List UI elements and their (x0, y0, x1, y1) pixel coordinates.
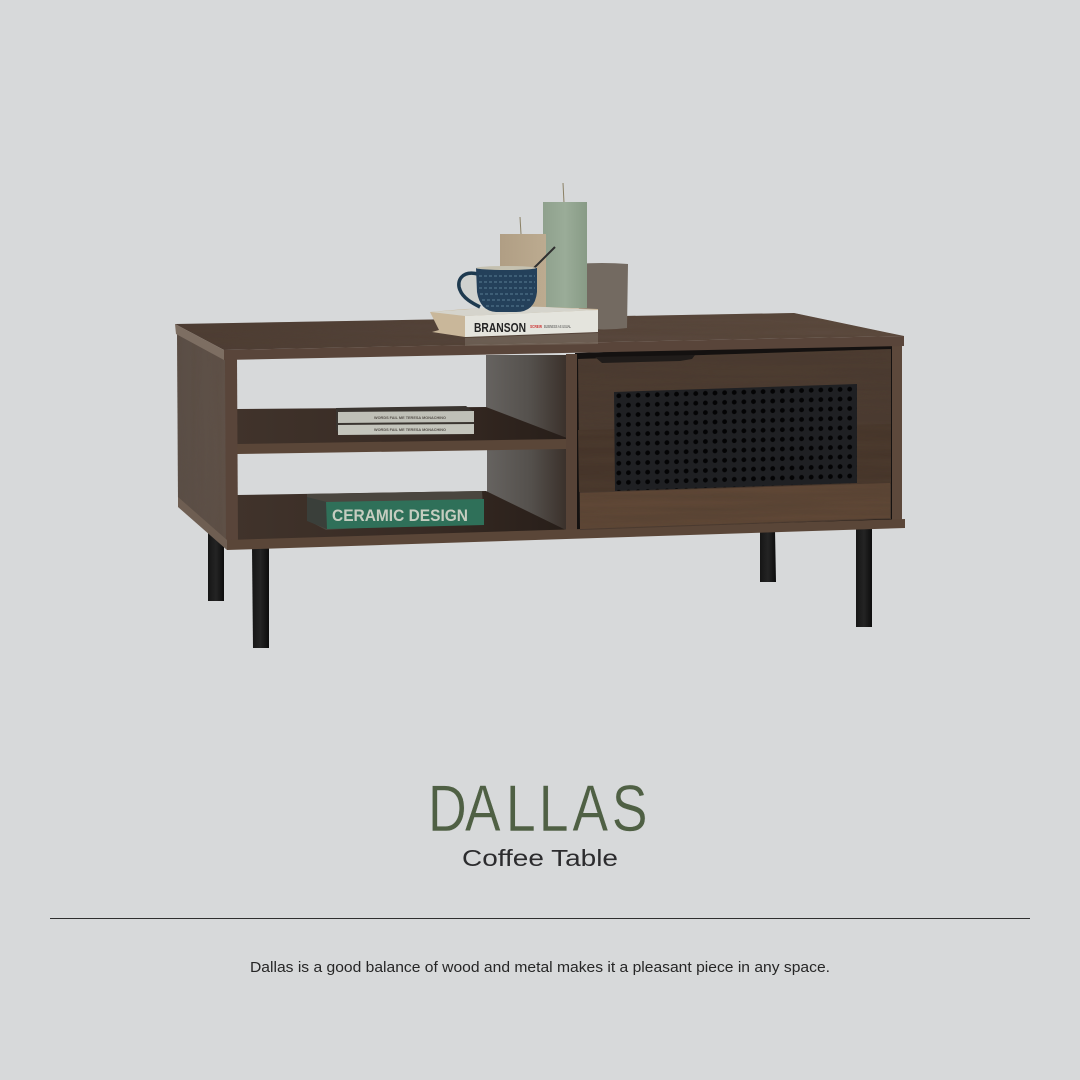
leg: front left (252, 548, 269, 648)
divider line (50, 918, 1030, 919)
beige candle (500, 217, 546, 308)
stacked books on shelf: WORDS FAIL ME TERESA MONACHINO (374, 427, 446, 432)
table top surface (175, 313, 904, 350)
table top front edge (224, 336, 904, 360)
mug (459, 247, 555, 312)
book: Ceramic Design: CERAMIC DESIGN (332, 506, 468, 525)
stacked books on shelf (336, 406, 474, 435)
bottom front edge (227, 519, 905, 550)
left side panel (177, 332, 227, 541)
description: Dallas is a good balance of wood and metal makes it a pleasant piece in any space. (250, 960, 830, 976)
stacked books on shelf: WORDS FAIL ME TERESA MONACHINO (374, 415, 446, 420)
leg: front right (856, 526, 872, 627)
book: Branson: BRANSON (474, 320, 526, 335)
subtitle: Coffee Table (462, 845, 618, 871)
coffee table (175, 313, 905, 648)
book: Branson: SCREW (530, 324, 543, 329)
drawer backing (575, 342, 892, 533)
spoon (534, 247, 555, 268)
leg: rear left (208, 530, 224, 601)
table top left edge (175, 324, 224, 360)
front left post (225, 358, 238, 542)
right post (890, 342, 902, 521)
lower back partition (487, 449, 567, 532)
grey stone candle (576, 263, 628, 330)
book: Branson (430, 306, 598, 337)
mug body (476, 268, 537, 312)
drawer front (578, 349, 891, 530)
middle shelf front edge (237, 439, 567, 454)
drawer handle (595, 355, 695, 363)
book reflection on table top (465, 333, 598, 346)
leg: rear right (760, 530, 776, 582)
middle shelf surface (237, 407, 567, 445)
mug handle (459, 273, 480, 307)
perforated metal panel (614, 384, 857, 491)
centre post (566, 354, 577, 533)
tall sage candle (543, 183, 587, 308)
bottom shelf surface (237, 491, 568, 541)
bottom left edge (178, 497, 227, 550)
title: DALLAS (428, 772, 648, 845)
upper back partition (486, 355, 567, 440)
book: Ceramic Design (307, 491, 484, 530)
book: Branson: BUSINESS AS USUAL (544, 324, 571, 329)
